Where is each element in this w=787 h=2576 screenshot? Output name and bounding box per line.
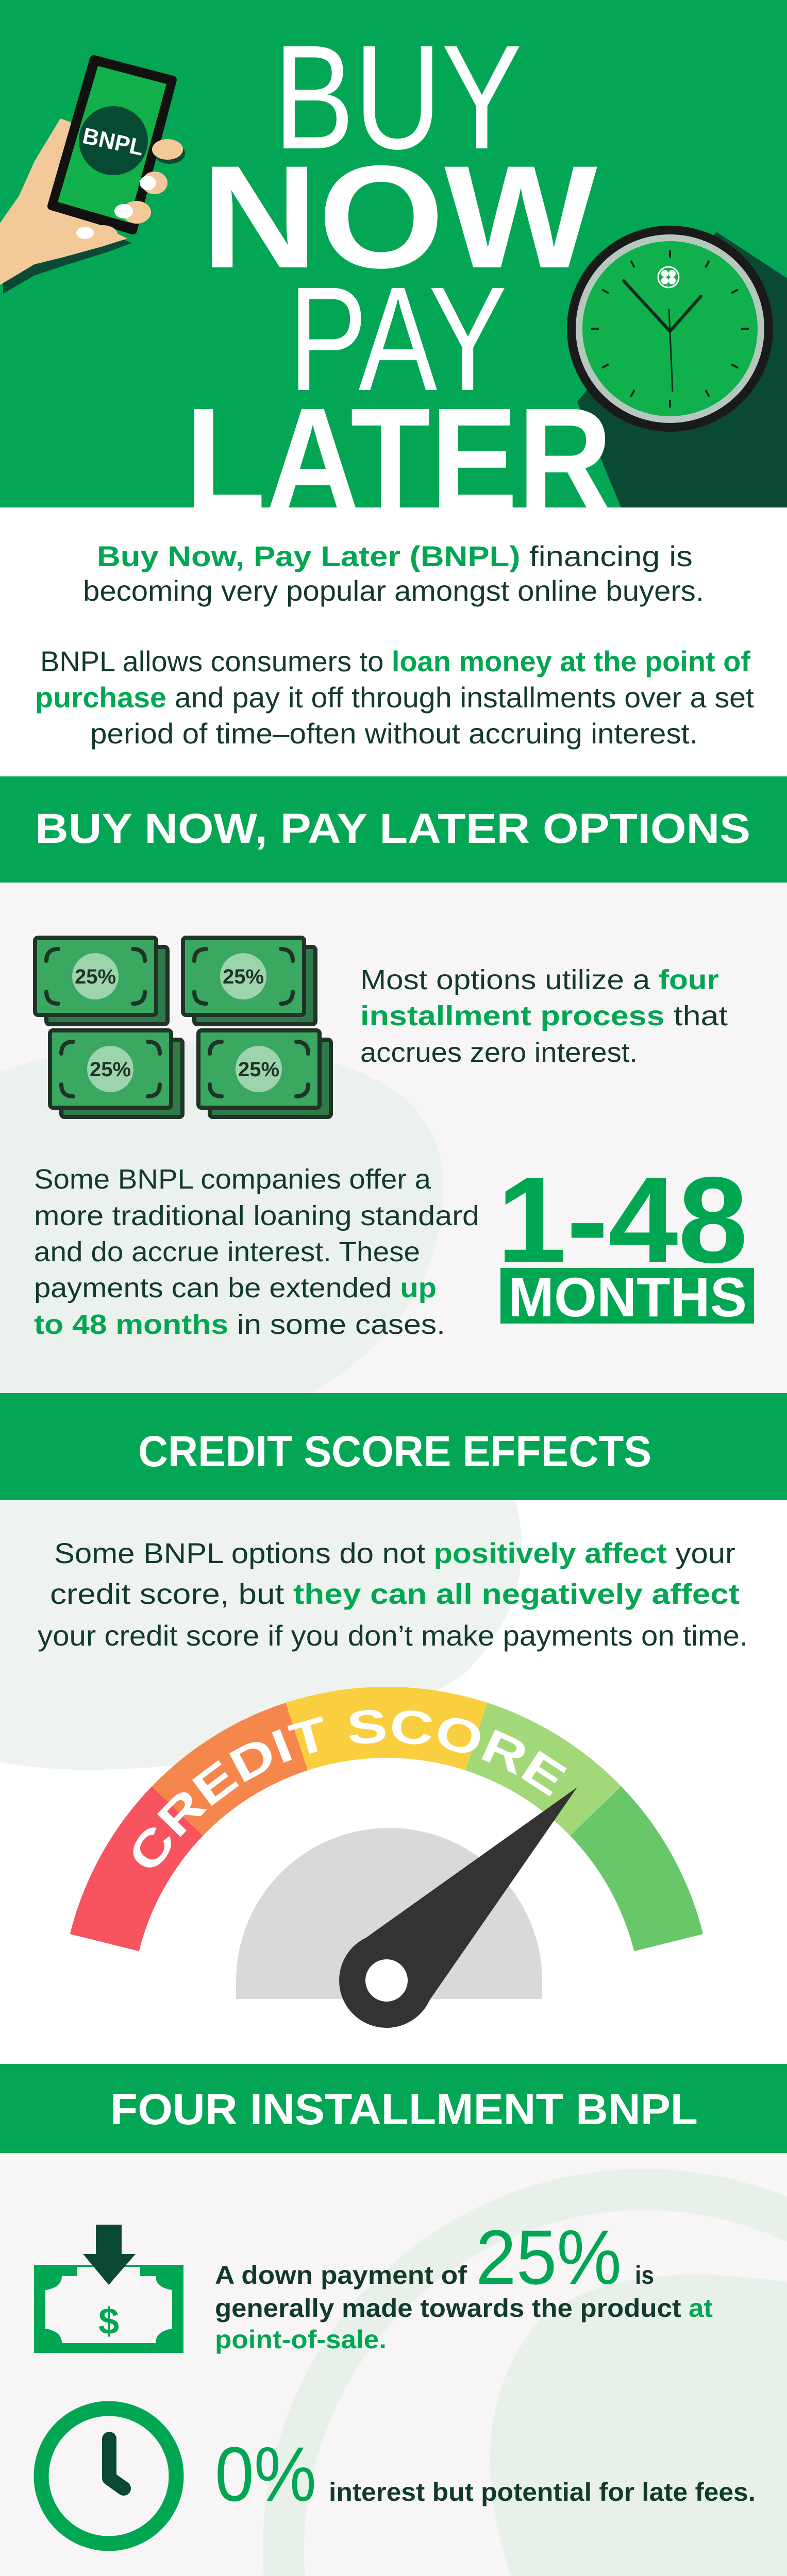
panel: four installment — [0, 2153, 787, 2576]
icon: wall clock — [567, 226, 773, 432]
title: BUY NOW PAY LATER: BUY — [274, 14, 522, 180]
text: 0% interest — [217, 2447, 753, 2506]
illustration: hand holding phone — [0, 59, 185, 294]
stat: 1-48 months: MONTHS — [508, 1266, 747, 1328]
text: credit effect: credit score, but they can all negatively affect — [50, 1578, 740, 1610]
text: down payment 25% — [215, 2230, 712, 2353]
header: green hero — [0, 0, 787, 543]
icon: BNPL badge — [79, 106, 148, 175]
clock shadow — [577, 232, 787, 507]
text: 0% interest: 0% — [215, 2431, 316, 2517]
heading bar: four installment — [0, 2064, 787, 2153]
intro text — [35, 540, 754, 750]
text: up to 48 months: Some BNPL companies offer a — [34, 1164, 431, 1195]
text: down payment 25%: point-of-sale. — [215, 2325, 387, 2354]
text: 0% interest: interest but potential for late fees. — [329, 2478, 756, 2506]
heading bar: four installment: FOUR INSTALLMENT BNPL — [110, 2085, 698, 2133]
title: BUY NOW PAY LATER: PAY — [289, 256, 507, 422]
text: credit effect — [38, 1537, 748, 1652]
text: down payment 25%: 25% — [476, 2214, 622, 2300]
title: BUY NOW PAY LATER: NOW — [201, 135, 599, 299]
text: four installment: accrues zero interest. — [360, 1037, 638, 1068]
text: up to 48 months: to 48 months in some cases. — [34, 1309, 445, 1340]
heading bar: options: BUY NOW, PAY LATER OPTIONS — [35, 805, 750, 852]
intro text: BNPL allows consumers to loan money at the point of — [40, 645, 750, 677]
icon: clock — [41, 2409, 176, 2544]
title: BUY NOW PAY LATER — [194, 46, 608, 507]
text: up to 48 months: and do accrue interest. These — [34, 1236, 420, 1267]
text: down payment 25%: is — [635, 2261, 654, 2290]
intro text: period of time–often without accruing interest. — [90, 717, 698, 750]
icon: BNPL badge: BNPL — [80, 123, 146, 161]
text: credit effect: Some BNPL options do not positively affect your — [54, 1537, 735, 1569]
text: down payment 25%: generally made towards the product at — [215, 2294, 713, 2323]
stat: 1-48 months: 1-48 — [497, 1152, 748, 1289]
chart: credit score gauge: CREDIT SCORE — [133, 1710, 567, 1868]
text: down payment 25%: A down payment of — [215, 2261, 467, 2290]
text: up to 48 months: more traditional loaning standard — [34, 1200, 479, 1231]
panel: credit score — [0, 1500, 745, 2028]
text: up to 48 months — [34, 1164, 479, 1340]
text: four installment: Most options utilize a four — [360, 964, 719, 995]
heading bar: credit score effects: CREDIT SCORE EFFECTS — [138, 1427, 651, 1476]
text: credit effect: your credit score if you don’t make payments on time. — [38, 1619, 748, 1652]
title: BUY NOW PAY LATER: LATER — [186, 377, 612, 543]
intro text: becoming very popular amongst online buyers. — [83, 574, 704, 607]
icon: money down: $ — [98, 2301, 119, 2342]
chart: credit score gauge — [70, 1687, 703, 2028]
panel: options — [0, 883, 787, 1393]
intro text: Buy Now, Pay Later (BNPL) financing is — [97, 540, 693, 572]
heading bar: options — [0, 776, 787, 883]
icon: money down — [34, 2225, 183, 2353]
text: four installment — [361, 969, 728, 1062]
heading bar: credit score effects — [0, 1393, 787, 1500]
icon: four 25% bills — [35, 938, 331, 1117]
intro text: purchase and pay it off through installments over a set — [35, 681, 754, 714]
stat: 1-48 months — [500, 1177, 754, 1324]
text: four installment: installment process that — [360, 1001, 728, 1031]
text: up to 48 months: payments can be extended up — [34, 1273, 437, 1303]
